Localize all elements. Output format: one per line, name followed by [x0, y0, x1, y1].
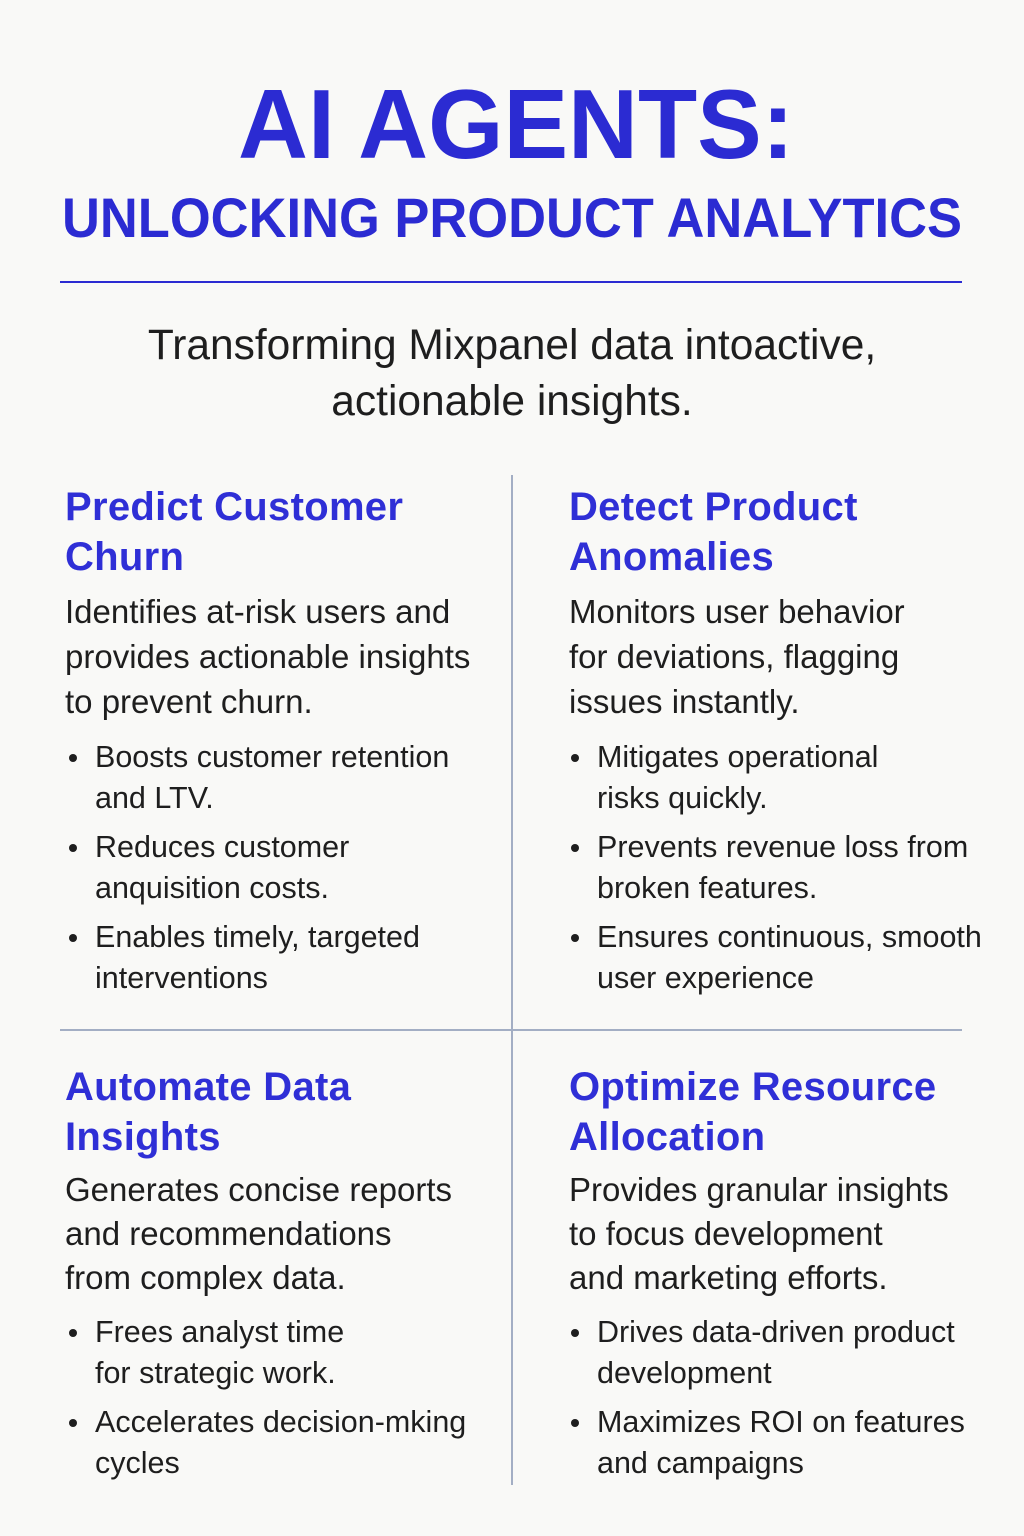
- panel: anomalies: user experience: [597, 961, 814, 995]
- body: to focus development: [569, 1215, 883, 1252]
- panel: churn: Enables timely, targeted: [95, 920, 420, 954]
- bullets: [69, 740, 449, 995]
- panel: insights: Accelerates decision-mking: [95, 1405, 466, 1439]
- bullets: [571, 1315, 965, 1480]
- panel: insights: cycles: [95, 1446, 180, 1480]
- title: [62, 69, 962, 249]
- body: Provides granular insights: [569, 1171, 949, 1208]
- heading: Anomalies: [569, 535, 774, 579]
- tagline: [148, 322, 876, 425]
- heading: [65, 485, 403, 579]
- panel: anomalies: Mitigates operational: [597, 740, 878, 774]
- body: and marketing efforts.: [569, 1259, 888, 1296]
- heading: Automate Data: [65, 1065, 351, 1109]
- heading: [65, 1065, 352, 1159]
- panel: churn: [65, 485, 470, 995]
- panel: anomalies: broken features.: [597, 871, 817, 905]
- panel: resources: [569, 1065, 965, 1480]
- title: AI AGENTS:: [238, 69, 794, 179]
- heading: Predict Customer: [65, 485, 403, 529]
- panel: churn: anquisition costs.: [95, 871, 329, 905]
- body: from complex data.: [65, 1259, 346, 1296]
- title: UNLOCKING PRODUCT ANALYTICS: [62, 186, 962, 249]
- body: [569, 593, 905, 720]
- panel: churn: interventions: [95, 961, 268, 995]
- panel: resources: development: [597, 1356, 772, 1390]
- panel: insights: Frees analyst time: [95, 1315, 344, 1349]
- bullets: [571, 740, 982, 995]
- panel: resources: Drives data-driven product: [597, 1315, 955, 1349]
- heading: [569, 485, 858, 579]
- panel: churn: Boosts customer retention: [95, 740, 449, 774]
- panel: anomalies: Ensures continuous, smooth: [597, 920, 982, 954]
- panel: anomalies: [569, 485, 982, 995]
- body: [569, 1171, 949, 1296]
- heading: [569, 1065, 936, 1159]
- heading: Insights: [65, 1115, 221, 1159]
- heading: Optimize Resource: [569, 1065, 936, 1109]
- bullets: [69, 1315, 466, 1480]
- panel: churn: Reduces customer: [95, 830, 349, 864]
- tagline: Transforming Mixpanel data intoactive,: [148, 322, 876, 369]
- panel: insights: for strategic work.: [95, 1356, 336, 1390]
- body: issues instantly.: [569, 683, 799, 720]
- panel: resources: and campaigns: [597, 1446, 804, 1480]
- tagline: actionable insights.: [331, 378, 693, 425]
- heading: Churn: [65, 535, 184, 579]
- heading: Allocation: [569, 1115, 765, 1159]
- body: Monitors user behavior: [569, 593, 905, 630]
- body: [65, 593, 470, 720]
- body: for deviations, flagging: [569, 638, 899, 675]
- body: provides actionable insights: [65, 638, 470, 675]
- body: and recommendations: [65, 1215, 392, 1252]
- panel: insights: [65, 1065, 466, 1480]
- body: Identifies at-risk users and: [65, 593, 450, 630]
- body: to prevent churn.: [65, 683, 313, 720]
- body: Generates concise reports: [65, 1171, 452, 1208]
- panel: anomalies: risks quickly.: [597, 781, 768, 815]
- panel: anomalies: Prevents revenue loss from: [597, 830, 968, 864]
- panel: resources: Maximizes ROI on features: [597, 1405, 965, 1439]
- panel: churn: and LTV.: [95, 781, 214, 815]
- heading: Detect Product: [569, 485, 858, 529]
- body: [65, 1171, 452, 1296]
